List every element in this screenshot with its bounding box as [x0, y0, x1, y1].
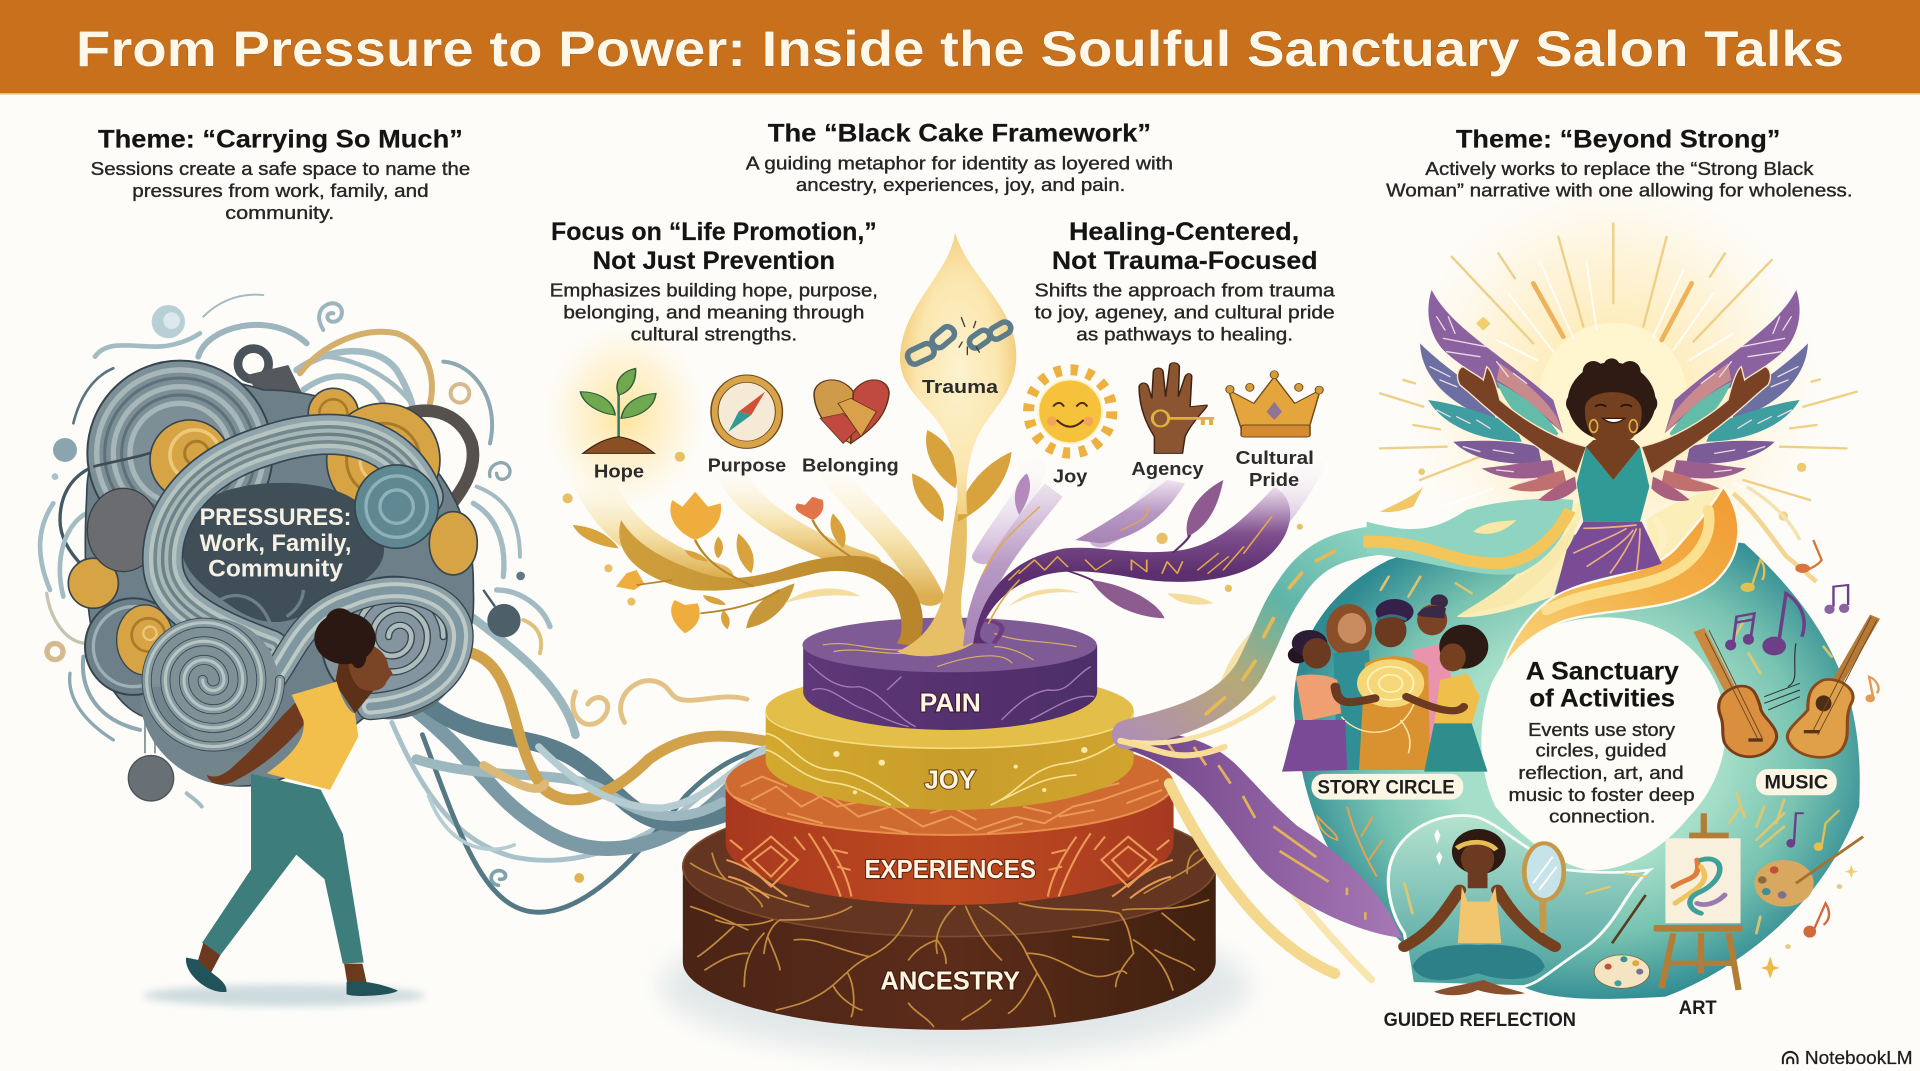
text: sanctuary of activities: connection.	[1549, 805, 1656, 826]
text: life promotion: Not Just Prevention	[593, 247, 835, 275]
text: sanctuary of activities: Events use story	[1528, 719, 1676, 740]
music notes	[1725, 560, 1879, 938]
label: guided reflection: GUIDED REFLECTION	[1384, 1009, 1576, 1031]
text: black cake framework	[746, 119, 1173, 195]
header banner	[0, 0, 1920, 95]
title: From Pressure to Power: Inside the Soulful Sanctuary Salon Talks	[76, 21, 1844, 77]
icon labels	[594, 376, 1314, 490]
label: pressures: Community	[208, 556, 343, 583]
patterned ribbon toward figure	[1120, 540, 1380, 755]
label plate	[180, 483, 384, 622]
label: art: ART	[1679, 997, 1717, 1019]
icon labels: Purpose	[708, 454, 786, 475]
layer: joy	[766, 672, 1134, 810]
text: theme carrying so much	[91, 126, 470, 223]
rope loop	[163, 434, 423, 650]
text: life promotion: cultural strengths.	[631, 323, 797, 344]
face	[348, 643, 393, 691]
cake base shadow	[661, 915, 1249, 1057]
text: sanctuary of activities: reflection, art, and	[1518, 762, 1684, 783]
text: sanctuary of activities: of Activities	[1529, 685, 1675, 713]
pale streaks	[591, 467, 1310, 597]
leaves and flowers	[573, 430, 1012, 629]
text: black cake framework: A guiding metaphor for identity as loyered with	[746, 153, 1173, 174]
hair	[314, 608, 376, 668]
easel and palettes	[1594, 813, 1863, 990]
layer: pain	[802, 618, 1097, 730]
tree of strengths	[563, 430, 1310, 656]
shoes	[186, 958, 398, 996]
text: beyond strong: Woman” narrative with one allowing for wholeness.	[1386, 180, 1853, 201]
golden branches	[619, 520, 923, 647]
cake labels: EXPERIENCES	[864, 856, 1036, 884]
label: pressures	[200, 504, 351, 583]
icon: belonging heart	[814, 380, 889, 443]
text: life promotion	[550, 218, 878, 344]
mirror	[1524, 843, 1564, 930]
storyteller one	[1282, 630, 1375, 772]
text: healing-centered: Healing-Centered,	[1069, 218, 1299, 246]
cake labels: ANCESTRY	[880, 967, 1020, 995]
layer: experiences	[726, 732, 1174, 905]
pill: music: MUSIC	[1764, 772, 1828, 794]
black cake layers	[683, 618, 1216, 1030]
woman carrying the load	[143, 608, 425, 1007]
arms	[1458, 367, 1587, 474]
left spiral	[147, 618, 297, 769]
text: sanctuary of activities	[1509, 658, 1695, 826]
hanging weights	[128, 590, 521, 801]
text: life promotion: belonging, and meaning through	[563, 301, 864, 322]
text: sanctuary of activities: circles, guided	[1536, 740, 1667, 761]
label: pressures: Work, Family,	[200, 530, 351, 557]
icon labels: Joy	[1053, 465, 1088, 486]
icon: agency hand and key	[1139, 363, 1214, 453]
reflection inset	[1388, 816, 1650, 987]
lower left coil	[85, 598, 182, 695]
icon: hope sprout	[580, 368, 656, 453]
hope glow	[541, 321, 708, 512]
cake labels: JOY	[924, 767, 976, 795]
right guitar	[1787, 617, 1877, 757]
text: beyond strong: Actively works to replace the “Strong Black	[1425, 158, 1814, 179]
text: healing-centered: as pathways to healing.	[1076, 323, 1293, 344]
left guitar	[1699, 630, 1777, 757]
text: healing-centered: Not Trauma-Focused	[1052, 247, 1318, 275]
guitars and music notes	[1699, 560, 1879, 938]
icon: joy sun	[1029, 370, 1112, 453]
icon: crown	[1226, 371, 1323, 437]
skirt	[1555, 522, 1662, 595]
upper left coil	[87, 361, 273, 546]
text: healing-centered	[1035, 218, 1336, 344]
storyteller three	[1341, 599, 1430, 770]
icon labels: Pride	[1249, 469, 1299, 490]
gold dabs	[1381, 577, 1831, 933]
shirt	[267, 682, 358, 790]
text: healing-centered: to joy, ageney, and cultural pride	[1035, 301, 1335, 322]
arm	[207, 698, 305, 784]
icon: broken chain	[906, 317, 1013, 366]
text: black cake framework: ancestry, experiences, joy, and pain.	[796, 174, 1125, 195]
icons row	[580, 363, 1323, 453]
purple ribbon into sanctuary	[1120, 732, 1402, 938]
text: healing-centered: Shifts the approach from trauma	[1035, 279, 1336, 300]
icon labels: Cultural	[1236, 447, 1314, 468]
text: sanctuary of activities: A Sanctuary	[1526, 658, 1679, 686]
guided reflection figure	[1404, 829, 1564, 995]
text: life promotion: Focus on “Life Promotion,”	[551, 218, 877, 246]
pale glow around skirt	[1457, 487, 1723, 617]
teal coil	[355, 465, 438, 548]
layer: ancestry	[683, 797, 1216, 1030]
mint flow	[1367, 499, 1573, 575]
cake labels: PAIN	[920, 689, 981, 717]
sanctuary ring	[1294, 534, 1860, 999]
icon: purpose compass	[711, 375, 782, 448]
music note top	[1795, 540, 1822, 573]
text: black cake framework: The “Black Cake Framework”	[768, 119, 1151, 147]
cake labels	[864, 689, 1036, 995]
icon labels: Belonging	[802, 454, 899, 475]
storyteller four	[1412, 594, 1452, 767]
text: theme carrying so much: Sessions create a safe space to name the	[91, 158, 470, 179]
wings	[1420, 290, 1808, 501]
flowing dress stream	[1502, 487, 1738, 670]
ribbons from pressures to cake	[392, 612, 771, 912]
text: sanctuary of activities: music to foster deep	[1509, 784, 1695, 805]
story circle group	[1282, 594, 1488, 772]
text: beyond strong: Theme: “Beyond Strong”	[1456, 126, 1780, 154]
gold coils	[68, 388, 440, 608]
storyteller five	[1406, 625, 1488, 772]
icon labels: Trauma	[922, 376, 999, 397]
face	[1585, 392, 1642, 447]
hair	[1566, 358, 1657, 441]
text: theme carrying so much: community.	[225, 202, 334, 223]
purple branches	[963, 483, 1063, 647]
dense ball mass	[85, 380, 474, 786]
pill: music	[1756, 769, 1837, 795]
top	[1577, 447, 1649, 522]
neck	[335, 657, 377, 713]
text: life promotion: Emphasizes building hope, purpose,	[550, 279, 878, 300]
sun glow and rays	[1380, 173, 1857, 600]
icon labels: Agency	[1131, 458, 1205, 479]
icon labels: Hope	[594, 461, 644, 482]
illustration: tangled pressures ball	[40, 295, 550, 807]
flame: trauma transformed	[900, 233, 1016, 514]
right gold coil	[429, 512, 477, 575]
trousers	[202, 774, 364, 964]
text: theme carrying so much: Theme: “Carrying So Much”	[98, 126, 463, 154]
text: beyond strong	[1386, 126, 1853, 201]
pill: story circle: STORY CIRCLE	[1318, 776, 1455, 798]
kettlebell	[238, 349, 317, 437]
white centre	[1481, 617, 1726, 870]
notebooklm mark: NotebookLM	[1805, 1047, 1913, 1068]
right swirl	[263, 577, 465, 715]
figure: rising woman with wings	[1363, 290, 1822, 670]
storyteller two	[1326, 604, 1372, 770]
gold streams under ribbon	[1169, 612, 1371, 980]
label: pressures: PRESSURES:	[200, 504, 351, 531]
text: theme carrying so much: pressures from work, family, and	[132, 180, 429, 201]
